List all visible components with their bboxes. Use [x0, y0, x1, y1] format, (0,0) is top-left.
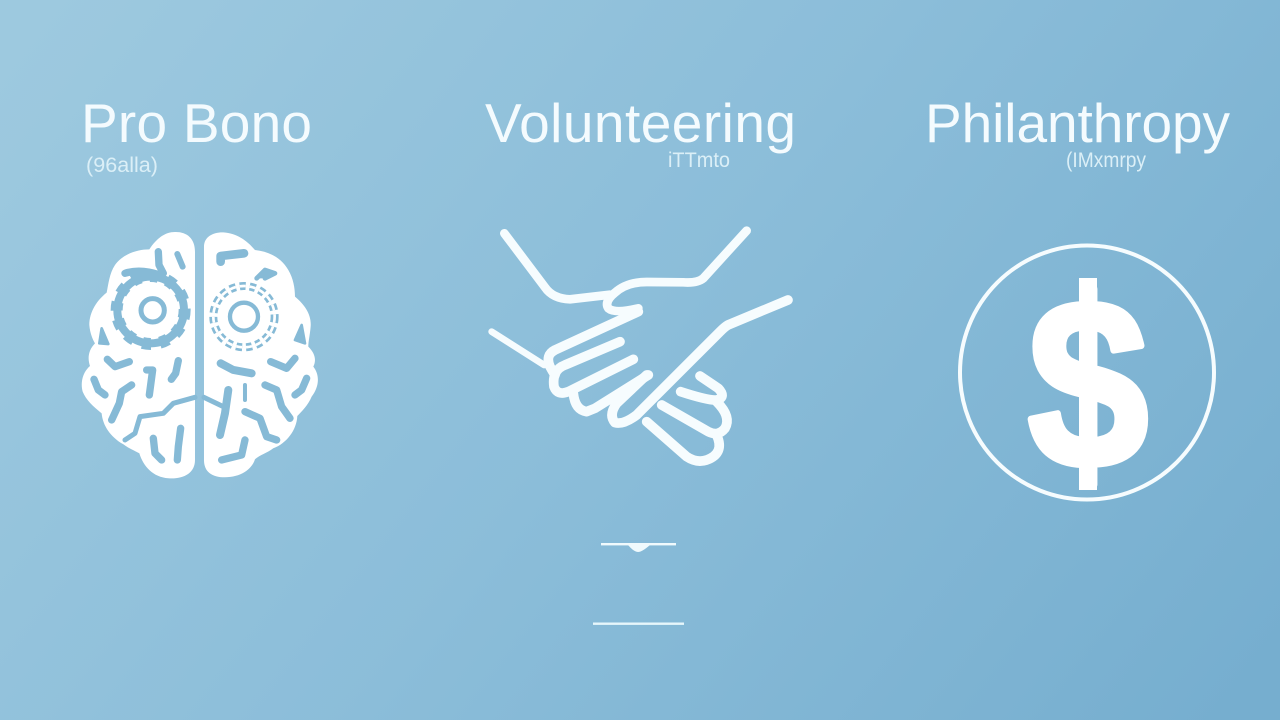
- subtitle: pro bono: (96alla): [86, 154, 158, 177]
- line: lower rule: [593, 622, 684, 625]
- fingers and lower arm: [548, 300, 788, 461]
- icon: handshake: [492, 231, 788, 461]
- panel: volunteering: [485, 92, 796, 625]
- subtitle: volunteering: iTTmto: [668, 149, 730, 172]
- panel: philanthropy: [925, 92, 1230, 519]
- heading: philanthropy: Philanthropy: [925, 92, 1230, 154]
- arms and thumb: [492, 231, 747, 365]
- icon: brain with gears: [82, 232, 318, 478]
- right hemisphere: [204, 232, 318, 477]
- left gear: [117, 271, 185, 344]
- coin ring: [960, 246, 1214, 500]
- right gear: [213, 286, 275, 347]
- line: upper rule with notch: [601, 543, 676, 552]
- dollar bar: [1079, 278, 1097, 490]
- left hemisphere: [82, 232, 195, 478]
- heading: pro bono: Pro Bono: [81, 92, 312, 154]
- brain folds: [94, 252, 307, 460]
- subtitle: philanthropy: (IMxmrpy: [1066, 149, 1146, 172]
- icon: dollar coin: [960, 246, 1214, 519]
- panel: pro bono: [81, 92, 318, 478]
- dollar sign: $: [1028, 250, 1148, 519]
- heading: volunteering: Volunteering: [485, 92, 796, 154]
